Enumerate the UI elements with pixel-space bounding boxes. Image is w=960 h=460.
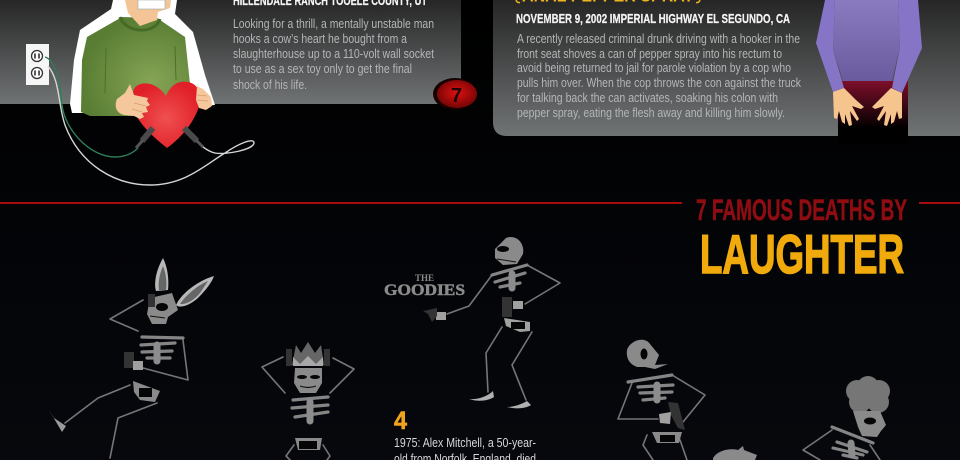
icon: right hand xyxy=(872,88,902,126)
illustration: man holding heart xyxy=(70,0,215,148)
skeleton: The Goodies xyxy=(384,237,560,408)
label: The Goodies xyxy=(384,273,465,299)
icon: left hand xyxy=(833,88,864,126)
text block: pepper spray story xyxy=(517,32,802,120)
text block: heart story xyxy=(233,17,434,92)
panel: entry 6, pepper spray xyxy=(493,0,960,136)
text block: heart story: shock of his life. xyxy=(233,78,307,92)
text block: pepper spray story: pepper spray, eating the flesh away and killing him slowly. xyxy=(517,106,785,120)
text block: heart story: slaughterhouse up to a 110-volt wall socket xyxy=(233,47,434,61)
skeleton: third figure head xyxy=(713,446,757,460)
panel: entry 7, heart shock xyxy=(0,0,461,104)
badge: number 7 xyxy=(433,78,477,110)
skeleton: head thrown back xyxy=(618,340,705,460)
illustration: man in purple sweater xyxy=(816,0,922,143)
icon: left hand xyxy=(116,84,150,119)
badge: number 7: 7 xyxy=(451,85,462,107)
icon: right hand xyxy=(196,86,212,110)
text block: heart story: Looking for a thrill, a mentally unstable man xyxy=(233,17,434,31)
text block: heart story: to use as a sex toy only to get the final xyxy=(233,62,412,76)
label: The Goodies: THE xyxy=(415,273,434,283)
icon: heart xyxy=(132,82,200,148)
text block: pepper spray story: for talking back the can activates, soaking his colon with xyxy=(517,91,778,105)
text block: pepper spray story: front seat shoves a can of pepper spray into his rectum to xyxy=(517,47,782,61)
skeleton: afro xyxy=(803,376,890,460)
divider line xyxy=(0,202,960,204)
entry 4 text xyxy=(394,407,536,460)
text block: Alex Mitchell: 1975: Alex Mitchell, a 50-year- xyxy=(394,435,536,450)
text block: heart story: hooks a cow’s heart he bought from a xyxy=(233,32,407,46)
icon: wall socket xyxy=(26,44,49,85)
number 4: 4 xyxy=(394,407,407,435)
text block: pepper spray story: pulls him over. When the cop throws the con against the truck xyxy=(517,76,802,90)
wires and plugs xyxy=(45,57,254,185)
title xyxy=(696,194,907,285)
skeleton: crown xyxy=(262,342,354,460)
text block: Alex Mitchell xyxy=(394,435,536,460)
label: The Goodies: GOODIES xyxy=(384,282,465,299)
heading: date and location: NOVEMBER 9, 2002 IMPERIAL HIGHWAY EL SEGUNDO, CA xyxy=(516,11,790,26)
skeleton: bunny ears xyxy=(49,258,214,458)
text block: pepper spray story: A recently released criminal drunk driving with a hooker in the xyxy=(517,32,800,46)
text block: pepper spray story: avoid being returned to jail for parole violation by a cop who xyxy=(517,61,791,75)
